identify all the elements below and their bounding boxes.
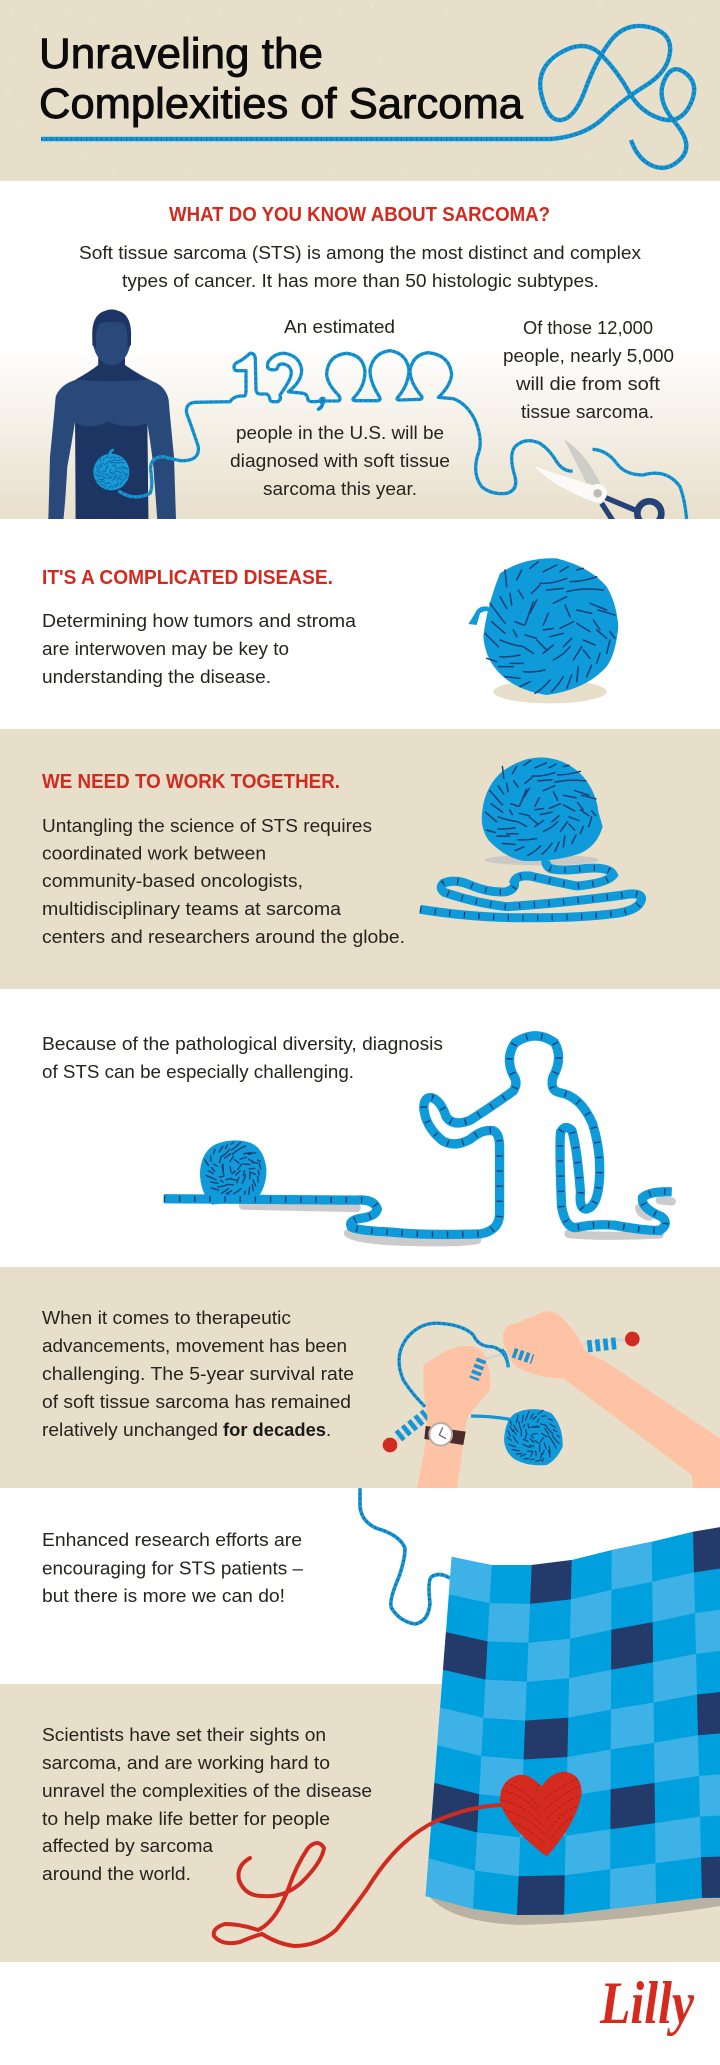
text: diagnosed: people in the U.S. will be (236, 422, 444, 443)
text: deaths: tissue sarcoma. (521, 401, 654, 422)
text: diagnosed: diagnosed with soft tissue (230, 450, 450, 471)
text: therapeutic advancements: When it comes to therapeutic (42, 1307, 291, 1328)
intro text: Soft tissue sarcoma (STS) is among the most distinct and complex (79, 242, 642, 263)
number text: estimated: An estimated (284, 316, 395, 337)
text: therapeutic advancements: for decades (223, 1419, 326, 1440)
text: work together: centers and researchers around the globe. (42, 926, 405, 947)
panel: therapeutic advancements (0, 1267, 720, 1490)
logo: Lilly: Lilly (599, 1970, 694, 2036)
text: research efforts: but there is more we can do! (42, 1585, 285, 1606)
text: deaths: will die from soft (515, 373, 660, 394)
panel: diagnosis (0, 989, 720, 1267)
panel: complicated disease (0, 519, 720, 729)
text: work together: Untangling the science of STS requires (42, 815, 372, 836)
heading: what do you know: WHAT DO YOU KNOW ABOUT SARCOMA? (169, 204, 550, 226)
icon: scissors (534, 439, 661, 527)
icon: unraveling rope (41, 26, 694, 168)
text: diagnosed (230, 422, 450, 499)
text: research efforts (42, 1529, 304, 1606)
text: scientists: affected by sarcoma (42, 1835, 214, 1856)
icon: hands knitting with yarn ball (383, 1311, 720, 1490)
text: complicated disease: understanding the disease. (42, 666, 271, 687)
text: deaths (503, 317, 674, 422)
text: scientists: to help make life better for people (42, 1808, 330, 1829)
text: work together (42, 815, 405, 947)
panel: scientists (0, 1684, 720, 1962)
text: therapeutic advancements: relatively unchanged (42, 1419, 218, 1440)
icon: yarn ball (468, 558, 618, 703)
text: complicated disease: are interwoven may be key to (42, 638, 289, 659)
text: diagnosis (42, 1033, 443, 1082)
title: Complexities of Sarcoma (39, 80, 523, 128)
text: therapeutic advancements: of soft tissue sarcoma has remained (42, 1391, 351, 1412)
text: diagnosis: Because of the pathological diversity, diagnosis (42, 1033, 443, 1054)
text: work together: multidisciplinary teams at sarcoma (42, 898, 342, 919)
text: deaths: Of those 12,000 (523, 317, 653, 338)
text: scientists (42, 1724, 372, 1884)
text: diagnosis: of STS can be especially challenging. (42, 1061, 354, 1082)
text: scientists: Scientists have set their sights on (42, 1724, 326, 1745)
icon: human silhouette with yarn tumor (48, 309, 176, 520)
text: therapeutic advancements (42, 1307, 354, 1440)
text: work together: coordinated work between (42, 842, 266, 864)
panel: header (0, 0, 720, 181)
text: scientists: around the world. (42, 1863, 191, 1884)
text: scientists: sarcoma, and are working hard to (42, 1752, 330, 1773)
wristwatch (424, 1423, 466, 1446)
intro text (79, 242, 642, 291)
panel: research efforts (0, 1488, 720, 1684)
text: diagnosed: sarcoma this year. (263, 478, 417, 499)
panel: what do you know about sarcoma (0, 181, 720, 527)
text: scientists: unravel the complexities of the disease (42, 1780, 372, 1801)
text: research efforts: Enhanced research efforts are (42, 1529, 302, 1550)
text: complicated disease: Determining how tumors and stroma (42, 610, 357, 631)
knitting needle tips (383, 1332, 640, 1452)
text: research efforts: encouraging for STS patients – (42, 1558, 304, 1578)
icon: yarn heart (500, 1772, 583, 1857)
illustration: checkered quilt (426, 1525, 720, 1925)
icon: yarn ball with loose rope (420, 757, 642, 918)
text: deaths: people, nearly 5,000 (503, 345, 674, 366)
yarn tumor (93, 450, 129, 490)
title: Unraveling the (39, 30, 323, 78)
icon: rope from above to quilt (360, 1488, 450, 1624)
text: work together: community-based oncologists, (42, 870, 303, 891)
icon: rope forming human figure from yarn ball (164, 1036, 672, 1242)
title (39, 30, 523, 128)
icon: red thread L-shape to heart (214, 1805, 502, 1946)
intro text: types of cancer. It has more than 50 histologic subtypes. (122, 270, 599, 291)
heading: complicated disease: IT'S A COMPLICATED DISEASE. (42, 567, 333, 589)
text: therapeutic advancements: challenging. The 5-year survival rate (42, 1363, 354, 1384)
text: complicated disease (42, 610, 357, 687)
text: therapeutic advancements: . (326, 1419, 331, 1440)
yarn ball (504, 1409, 563, 1466)
heading: work together: WE NEED TO WORK TOGETHER. (42, 771, 340, 793)
panel: work together (0, 729, 720, 989)
text: therapeutic advancements: advancements, movement has been (42, 1335, 347, 1356)
icon: rope forming 12,000 and running to scissors (118, 351, 687, 520)
